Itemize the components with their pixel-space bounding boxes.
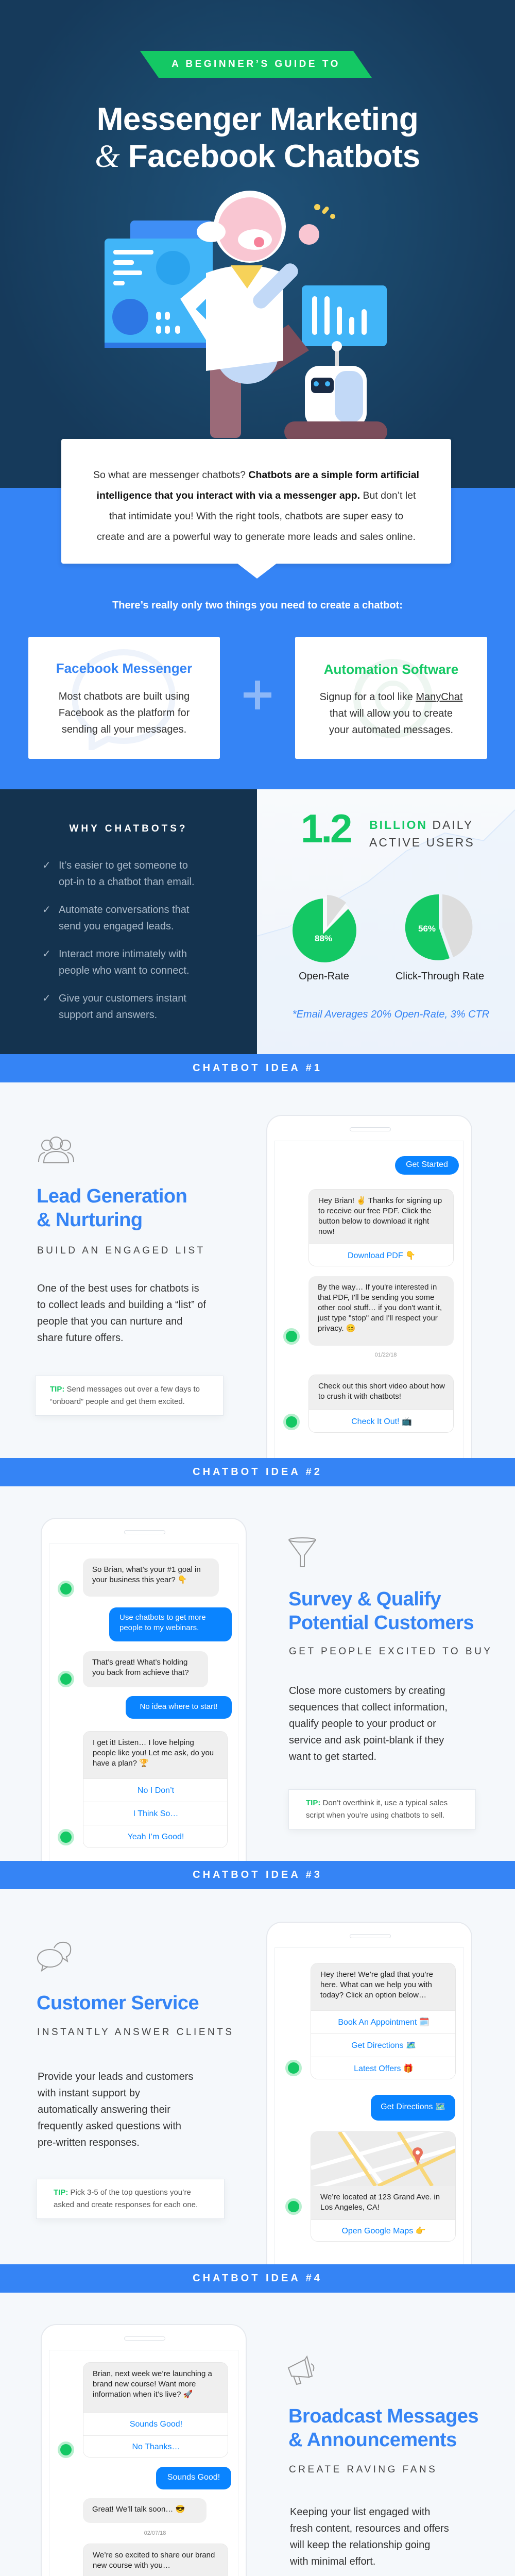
phone mockup 1: 01/22/18 bbox=[375, 1352, 397, 1358]
icon: people bbox=[38, 1137, 74, 1163]
panel: facebook messenger bbox=[28, 637, 220, 759]
tip: TIP: Send messages out over a few days to bbox=[50, 1385, 200, 1394]
panel: automation software: that will allow you to create bbox=[330, 708, 453, 719]
note: email averages: *Email Averages 20% Open-Rate, 3% CTR bbox=[293, 1009, 489, 1020]
intro text box: intelligence that you interact with via a messenger app. But don’t let bbox=[97, 490, 416, 501]
list: reasons: send you engaged leads. bbox=[59, 921, 174, 932]
panel: stats: Open-Rate bbox=[299, 971, 349, 982]
panel: stats: BILLION DAILY bbox=[369, 818, 473, 832]
phone mockup 1 bbox=[266, 1115, 472, 1458]
phone mockup 2: So Brian, what’s your #1 goal in your business this year? 👇 bbox=[92, 1565, 201, 1584]
panel: stats: Click-Through Rate bbox=[396, 971, 484, 982]
heading: Lead Generation bbox=[37, 1185, 187, 1207]
icon: plus bbox=[244, 681, 271, 709]
illustration: scientist, screens and robot bbox=[105, 191, 387, 439]
section: lead generation: One of the best uses for chatbots is bbox=[37, 1283, 199, 1294]
section: broadcast: will keep the relationship going bbox=[290, 2539, 430, 2551]
phone mockup 1: Hey Brian! ✌️ Thanks for signing up to receive our free PDF. Click the button below to download it right now! bbox=[318, 1196, 442, 1236]
phone mockup 4: No Thanks… bbox=[132, 2443, 180, 2451]
section: lead generation bbox=[35, 1115, 472, 1458]
list: reasons bbox=[42, 860, 195, 1021]
phone mockup 3: Get Directions 🗺️ bbox=[381, 2103, 445, 2111]
phone mockup 2: Yeah I’m Good! bbox=[128, 1833, 184, 1841]
heading: two things: There’s really only two things you need to create a chatbot: bbox=[112, 600, 403, 611]
section: lead generation: BUILD AN ENGAGED LIST bbox=[37, 1245, 205, 1256]
panel: automation software: your automated messages. bbox=[329, 724, 453, 736]
intro text box: create and are a powerful way to generate more leads and sales online. bbox=[97, 531, 416, 543]
tip: TIP: Pick 3-5 of the top questions you’re bbox=[54, 2188, 191, 2197]
intro text box bbox=[61, 439, 451, 564]
phone mockup 3: Latest Offers 🎁 bbox=[354, 2064, 414, 2073]
map bbox=[311, 2132, 455, 2186]
section: customer service: pre-written responses. bbox=[38, 2137, 140, 2148]
icon: gear watermark bbox=[353, 659, 433, 738]
phone mockup 3: Hey there! We’re glad that you’re here. What can we help you with today? Click an option below… bbox=[320, 1970, 433, 1999]
main title: & Facebook Chatbots bbox=[95, 139, 420, 174]
phone mockup 2: No I Don’t bbox=[138, 1786, 174, 1795]
section: broadcast: Keeping your list engaged with bbox=[290, 2506, 430, 2518]
heading: & Nurturing bbox=[37, 1209, 143, 1231]
phone mockup 1: Check It Out! 📺 bbox=[351, 1417, 412, 1426]
pie chart: ctr bbox=[405, 894, 473, 960]
section: customer service: frequently asked questions with bbox=[38, 2121, 181, 2132]
list: reasons: It’s easier to get someone to bbox=[59, 860, 188, 871]
section: broadcast bbox=[41, 2324, 478, 2576]
phone mockup 4: Sounds Good! bbox=[167, 2473, 220, 2482]
panel: facebook messenger: sending all your messages. bbox=[62, 724, 186, 735]
panel: automation software bbox=[295, 637, 487, 759]
heading: Broadcast Messages bbox=[288, 2405, 478, 2427]
list: reasons: support and answers. bbox=[59, 1009, 157, 1021]
list: reasons: Interact more intimately with bbox=[59, 948, 187, 960]
phone mockup 3: Book An Appointment 🗓️ bbox=[338, 2018, 430, 2027]
title banner: beginner's guide: A BEGINNER’S GUIDE TO bbox=[171, 59, 340, 70]
list: reasons: Automate conversations that bbox=[59, 904, 189, 916]
phone mockup 4: Great! We’ll talk soon… 😎 bbox=[92, 2505, 185, 2514]
phone mockup 4 bbox=[41, 2324, 247, 2576]
phone mockup 2: That’s great! What’s holding you back from achieve that? bbox=[92, 1658, 189, 1677]
panel: stats: ACTIVE USERS bbox=[369, 836, 475, 849]
panel: why chatbots: WHY CHATBOTS? bbox=[69, 823, 187, 834]
icon: messenger watermark bbox=[72, 649, 175, 750]
icon: speech bubbles bbox=[37, 1941, 71, 1972]
heading bbox=[288, 2405, 478, 2451]
chart line background bbox=[257, 810, 515, 937]
panel: facebook messenger: Facebook Messenger bbox=[56, 660, 192, 676]
hero background bbox=[0, 0, 515, 488]
section: customer service: automatically answering their bbox=[38, 2104, 170, 2115]
band: idea 1: CHATBOT IDEA #1 bbox=[193, 1062, 322, 1074]
section: lead generation: share future offers. bbox=[37, 1332, 124, 1344]
phone mockup 3 bbox=[266, 1922, 472, 2264]
band: idea 2 bbox=[0, 1458, 515, 1486]
list: reasons: ✓ bbox=[42, 904, 51, 916]
section: broadcast: CREATE RAVING FANS bbox=[289, 2464, 437, 2475]
blue band behind intro bbox=[0, 488, 515, 789]
phone mockup 2 bbox=[41, 1518, 247, 1861]
section: customer service bbox=[36, 1922, 472, 2264]
list: reasons: ✓ bbox=[42, 993, 51, 1004]
section: survey & qualify: service and ask point-blank if they bbox=[289, 1735, 444, 1746]
notch arrow under intro box bbox=[237, 563, 277, 579]
band: idea 4 bbox=[0, 2264, 515, 2293]
phone mockup 3: Get Directions 🗺️ bbox=[351, 2041, 416, 2050]
panel: facebook messenger: Facebook as the platform for bbox=[59, 707, 190, 719]
section: survey & qualify: qualify people to your product or bbox=[289, 1718, 436, 1730]
band: idea 2: CHATBOT IDEA #2 bbox=[193, 1466, 322, 1478]
phone mockup 1: Check out this short video about how to crush it with chatbots! bbox=[318, 1382, 445, 1401]
heading: Customer Service bbox=[37, 1992, 199, 2014]
tip: TIP: Don’t overthink it, use a typical sales bbox=[306, 1799, 448, 1807]
tip bbox=[35, 1376, 224, 1416]
phone mockup 4: Sounds Good! bbox=[130, 2420, 182, 2429]
list: reasons: ✓ bbox=[42, 948, 51, 960]
icon: megaphone bbox=[287, 2355, 314, 2385]
section: survey & qualify bbox=[41, 1518, 492, 1861]
band: idea 1 bbox=[0, 1054, 515, 1082]
section: lead generation: to collect leads and building a “list” of bbox=[37, 1299, 206, 1311]
main title: Messenger Marketing bbox=[97, 101, 418, 137]
band: idea 3 bbox=[0, 1861, 515, 1889]
tip: script when you’re using chatbots to sell. bbox=[306, 1811, 444, 1820]
phone mockup 2: I Think So… bbox=[133, 1809, 178, 1818]
phone mockup 2: No idea where to start! bbox=[140, 1702, 217, 1711]
panel: facebook messenger: Most chatbots are built using bbox=[59, 691, 190, 702]
section: survey & qualify: Close more customers by creating bbox=[289, 1685, 445, 1697]
panel: why chatbots bbox=[0, 789, 257, 1054]
section: broadcast: with minimal effort. bbox=[290, 2556, 375, 2567]
heading bbox=[37, 1185, 187, 1231]
panel: stats bbox=[257, 789, 515, 1054]
phone mockup 2: Use chatbots to get more people to my webinars. bbox=[119, 1613, 206, 1632]
phone mockup 4: 02/07/18 bbox=[144, 2530, 166, 2536]
section: survey & qualify: sequences that collect information, bbox=[289, 1702, 448, 1713]
section: customer service: with instant support by bbox=[38, 2088, 140, 2099]
heading: Survey & Qualify bbox=[288, 1588, 441, 1610]
pie chart: open rate bbox=[293, 895, 356, 962]
list: reasons: people who want to connect. bbox=[59, 965, 190, 976]
phone mockup 1: Get Started bbox=[406, 1160, 448, 1169]
heading bbox=[288, 1588, 474, 1634]
pie chart: open rate: 88% bbox=[315, 934, 332, 943]
title banner: beginner's guide bbox=[140, 51, 372, 78]
tip bbox=[36, 2179, 225, 2219]
band: idea 4: CHATBOT IDEA #4 bbox=[193, 2273, 322, 2284]
panel: automation software: Automation Software bbox=[324, 662, 458, 677]
pie chart: ctr: 56% bbox=[418, 924, 436, 934]
section: broadcast: fresh content, resources and offers bbox=[290, 2523, 449, 2534]
phone mockup 3: Open Google Maps 👉 bbox=[341, 2227, 426, 2235]
section: survey & qualify: want to get started. bbox=[289, 1751, 376, 1762]
stat: 1.2 billion: 1.2 bbox=[301, 806, 350, 851]
heading: & Announcements bbox=[288, 2429, 457, 2451]
phone mockup 1: By the way… If you're interested in that PDF, I'll be sending you some other cool stuff… if you don't want it, just type "stop" and I'll respect your privacy. 😊 bbox=[318, 1283, 442, 1333]
phone mockup 4: We’re so excited to share our brand new course with you… bbox=[93, 2551, 215, 2570]
section: customer service: INSTANTLY ANSWER CLIENTS bbox=[37, 2027, 234, 2038]
icon: funnel bbox=[288, 1537, 316, 1567]
list: reasons: Give your customers instant bbox=[59, 993, 186, 1004]
intro text box: that intimidate you! With the right tools, chatbots are super easy to bbox=[109, 511, 403, 522]
section: survey & qualify: GET PEOPLE EXCITED TO BUY bbox=[289, 1646, 492, 1657]
panel: automation software: Signup for a tool like ManyChat bbox=[320, 691, 462, 703]
list: reasons: opt-in to a chatbot than email. bbox=[59, 876, 195, 888]
phone mockup 3: We’re located at 123 Grand Ave. in Los Angeles, CA! bbox=[320, 2193, 440, 2212]
tip: asked and create responses for each one. bbox=[54, 2200, 198, 2209]
intro text box: So what are messenger chatbots? Chatbots are a simple form artificial bbox=[93, 469, 419, 481]
main title bbox=[95, 101, 420, 174]
phone mockup 1: Download PDF 👇 bbox=[348, 1251, 416, 1260]
list: reasons: ✓ bbox=[42, 860, 51, 871]
section: customer service: Provide your leads and customers bbox=[38, 2071, 193, 2082]
phone mockup 2: I get it! Listen… I love helping people like you! Let me ask, do you have a plan? 🏆 bbox=[93, 1738, 214, 1768]
tip: “onboard” people and get them excited. bbox=[50, 1397, 185, 1406]
section: lead generation: people that you can nurture and bbox=[37, 1316, 182, 1327]
band: idea 3: CHATBOT IDEA #3 bbox=[193, 1869, 322, 1880]
tip bbox=[288, 1789, 476, 1829]
phone mockup 4: Brian, next week we’re launching a brand new course! Want more information when it’s live? 🚀 bbox=[93, 2369, 212, 2399]
heading: Potential Customers bbox=[288, 1612, 474, 1634]
